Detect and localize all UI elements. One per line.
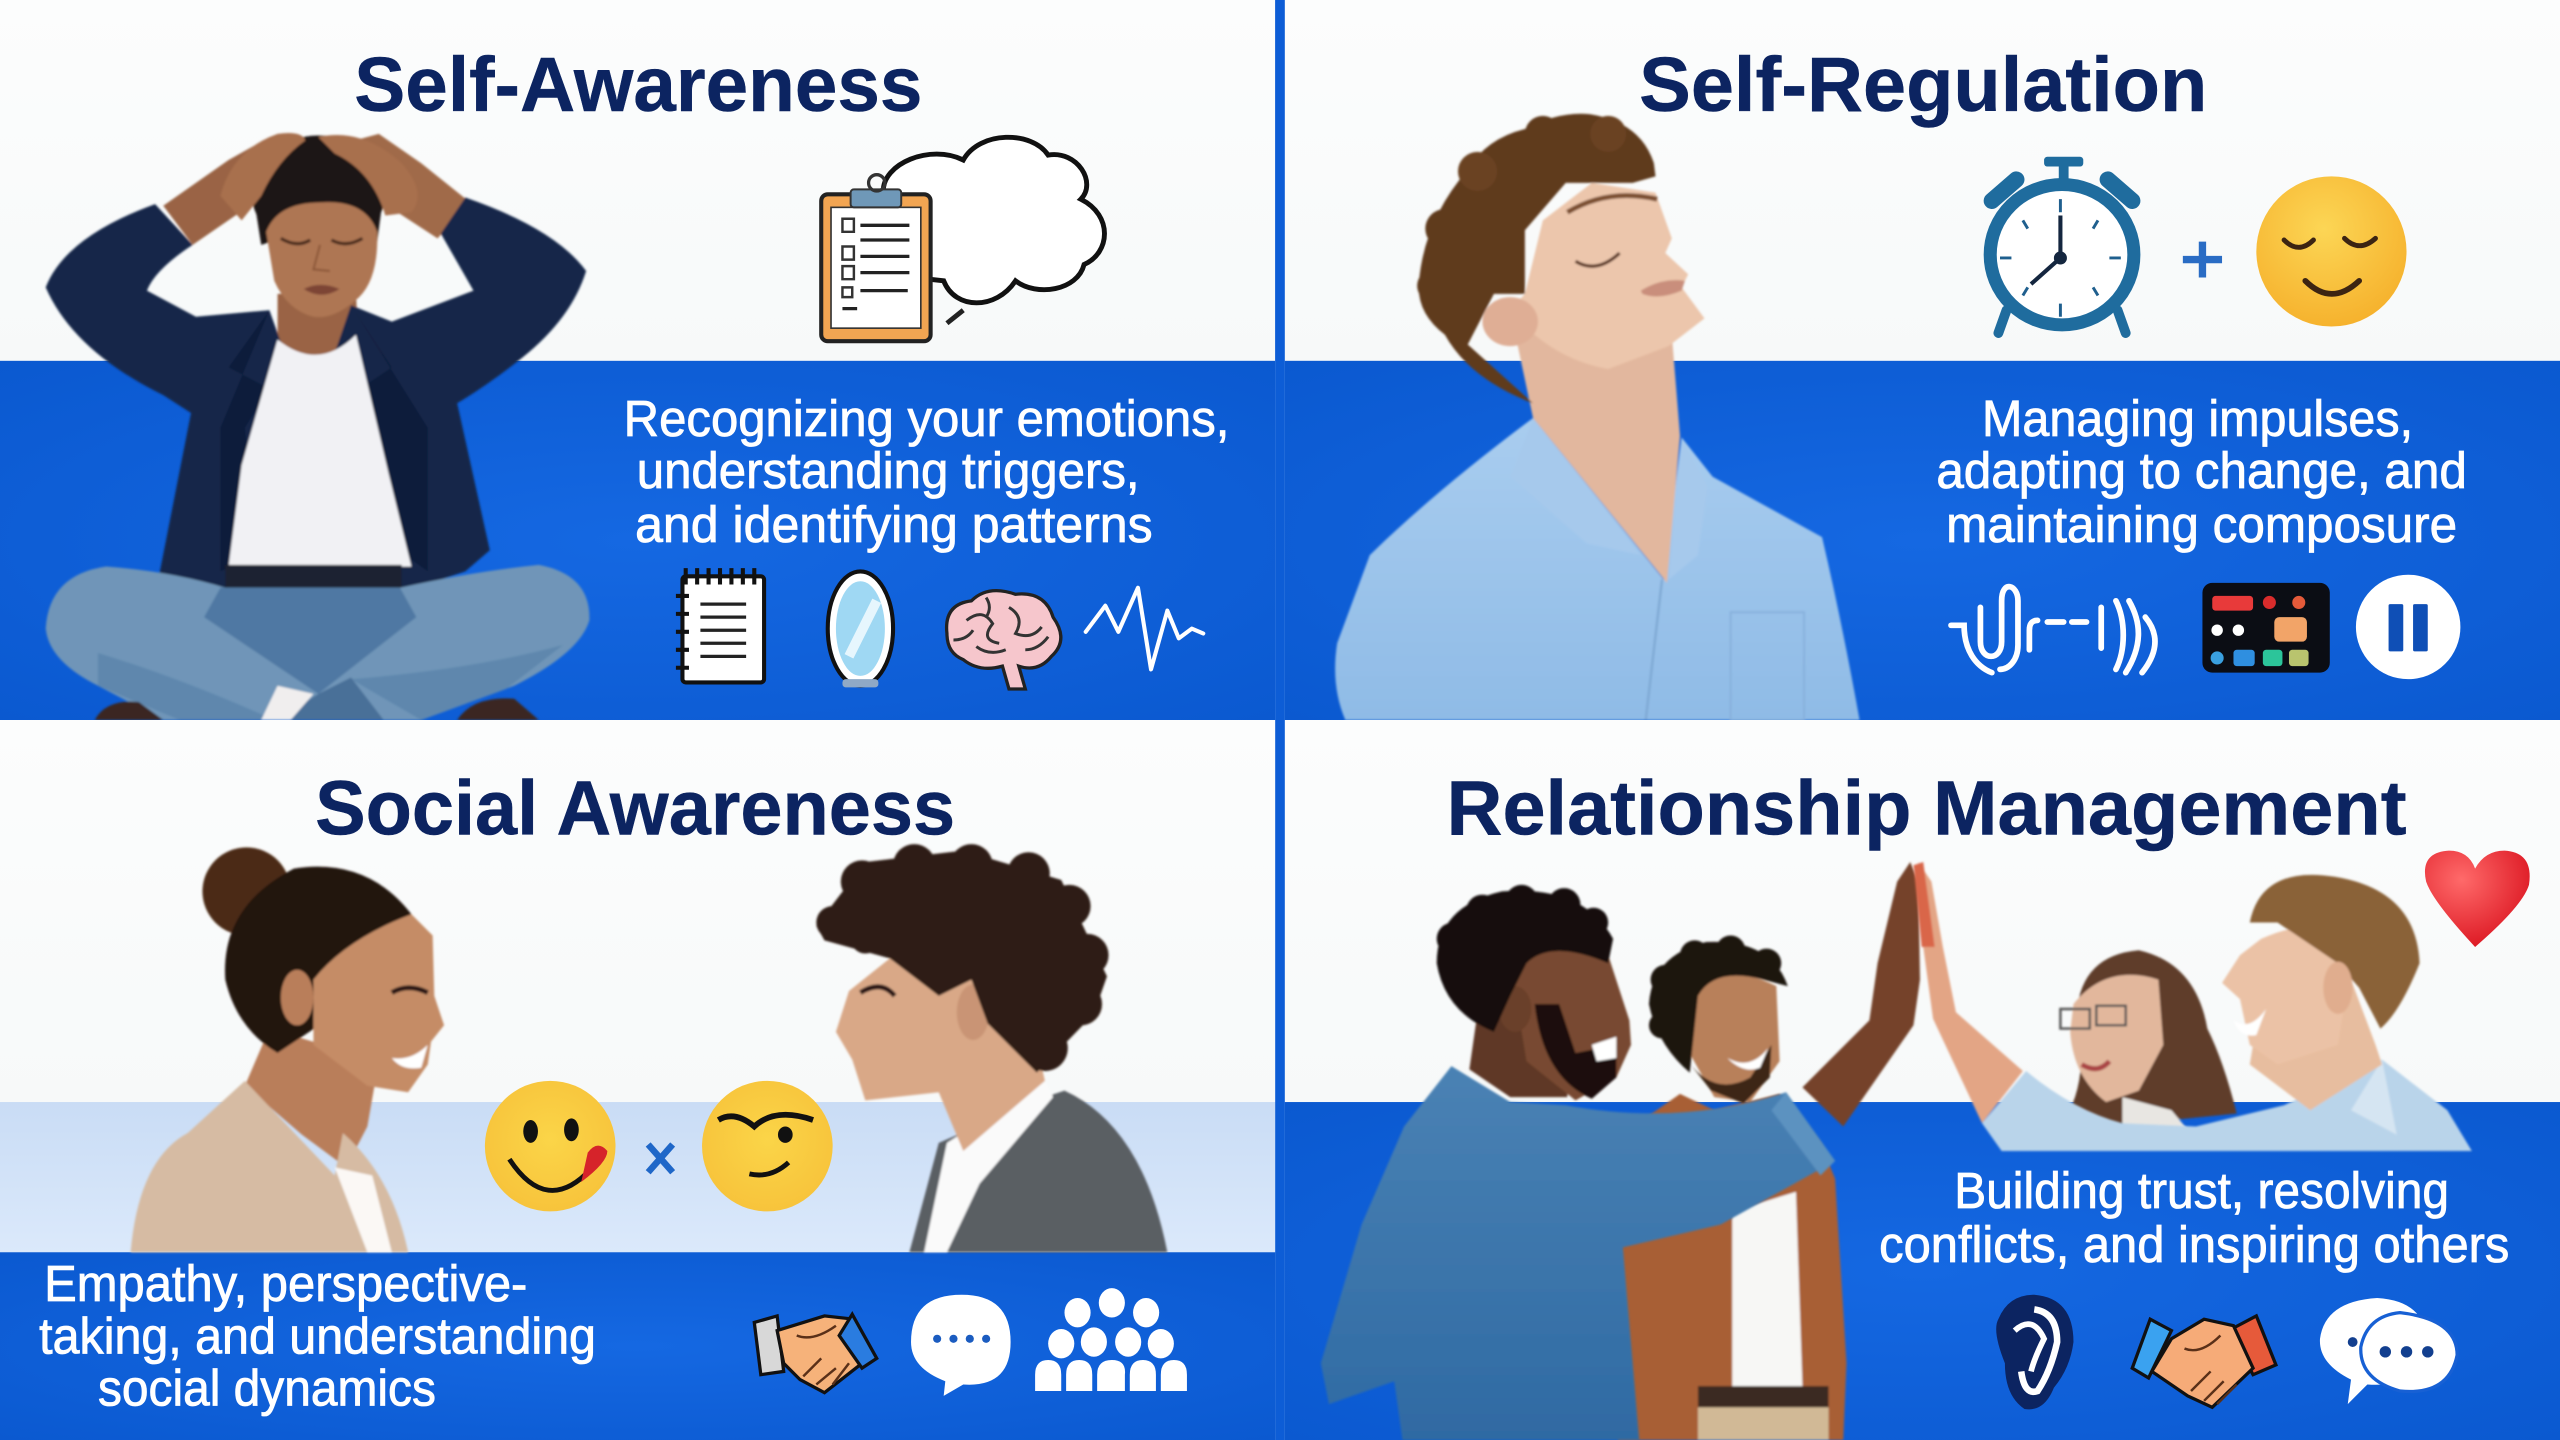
heading: self-regulation: Self-Regulation	[1639, 43, 2207, 128]
person: curly-haired man	[816, 844, 1167, 1252]
person: woman with glasses	[2060, 950, 2237, 1135]
icon: breathing wave	[1951, 587, 2155, 673]
person: woman with hands on head	[46, 133, 589, 720]
neck and head	[2250, 980, 2382, 1110]
icon: mirror	[828, 571, 893, 687]
icon: notebook	[676, 568, 764, 682]
icon: control panel	[2202, 583, 2330, 673]
panel: self-awareness	[0, 0, 1275, 720]
curly hair	[816, 851, 1107, 1073]
hair	[1419, 114, 1656, 403]
icon: ear	[1996, 1295, 2073, 1409]
hair and bun	[202, 847, 291, 936]
icon: calm emoji	[2256, 176, 2407, 327]
face	[266, 202, 377, 317]
person: smiling woman	[131, 847, 444, 1252]
person: man with eyes closed	[1335, 114, 1860, 720]
icon: heart	[2425, 851, 2530, 947]
description: adapting to change, and	[1936, 442, 2467, 499]
neck and face	[836, 958, 1045, 1151]
description: conflicts, and inspiring others	[1879, 1216, 2509, 1273]
icon: multiply sign	[648, 1144, 673, 1172]
description: taking, and understanding	[39, 1307, 596, 1364]
person: man in denim shirt with raised arm	[1321, 862, 1920, 1440]
description: social dynamics	[98, 1360, 436, 1417]
belt	[225, 565, 402, 589]
face	[313, 914, 444, 1092]
icon: overlapping speech bubbles	[2320, 1298, 2457, 1404]
jacket	[46, 198, 586, 596]
person: man in brown jacket	[1618, 936, 1847, 1440]
icon: crowd	[1035, 1288, 1187, 1391]
heading: social awareness: Social Awareness	[315, 766, 955, 851]
hands	[220, 133, 305, 220]
icon: brain	[947, 591, 1061, 689]
icon: pulse	[1086, 588, 1203, 669]
shirt	[1982, 1060, 2472, 1151]
description: Building trust, resolving	[1954, 1162, 2449, 1219]
neck	[1510, 310, 1680, 583]
description: Empathy, perspective-	[44, 1255, 527, 1312]
person: man in light shirt with raised arm	[1913, 862, 2472, 1151]
description	[1879, 1162, 2509, 1273]
feet	[95, 698, 539, 720]
shirt	[1335, 418, 1860, 720]
panel: relationship management	[1285, 720, 2560, 1440]
forearms	[163, 137, 291, 245]
description: and identifying patterns	[635, 496, 1153, 553]
description	[1936, 390, 2467, 553]
white t-shirt	[229, 335, 411, 567]
icon: speech bubble	[911, 1295, 1011, 1396]
denim shirt	[1321, 1066, 1835, 1440]
icon: plus	[2183, 242, 2222, 278]
icon: clipboard and thought cloud	[821, 137, 1104, 341]
icon: pause button	[2356, 575, 2460, 679]
description: understanding triggers,	[637, 442, 1140, 499]
shirt	[131, 1081, 408, 1252]
icon: skeptical emoji	[702, 1081, 833, 1211]
raised arm and hand	[1802, 862, 1920, 1127]
description: Managing impulses,	[1982, 390, 2413, 447]
face	[1510, 183, 1704, 369]
icon: handshake with colored sleeves	[2132, 1316, 2276, 1407]
icon: tongue-out emoji	[485, 1081, 616, 1211]
ear	[1482, 297, 1538, 346]
description	[624, 390, 1229, 553]
heading: self-awareness: Self-Awareness	[354, 43, 922, 128]
panel: self-regulation	[1285, 0, 2560, 720]
neck	[245, 1029, 379, 1167]
icon: alarm clock	[1990, 157, 2134, 333]
description: Recognizing your emotions,	[624, 390, 1229, 447]
jacket	[909, 1091, 1167, 1252]
raised arm and hand	[1918, 862, 2023, 1123]
icon: handshake	[754, 1314, 877, 1393]
divider	[1275, 0, 1285, 1440]
description: maintaining composure	[1946, 496, 2457, 553]
jeans	[46, 565, 589, 720]
hair	[251, 136, 385, 250]
heading: relationship management: Relationship Management	[1447, 766, 2407, 851]
description	[39, 1255, 596, 1417]
neck, head and beard	[1469, 1012, 1567, 1097]
panel: social awareness	[0, 720, 1275, 1440]
